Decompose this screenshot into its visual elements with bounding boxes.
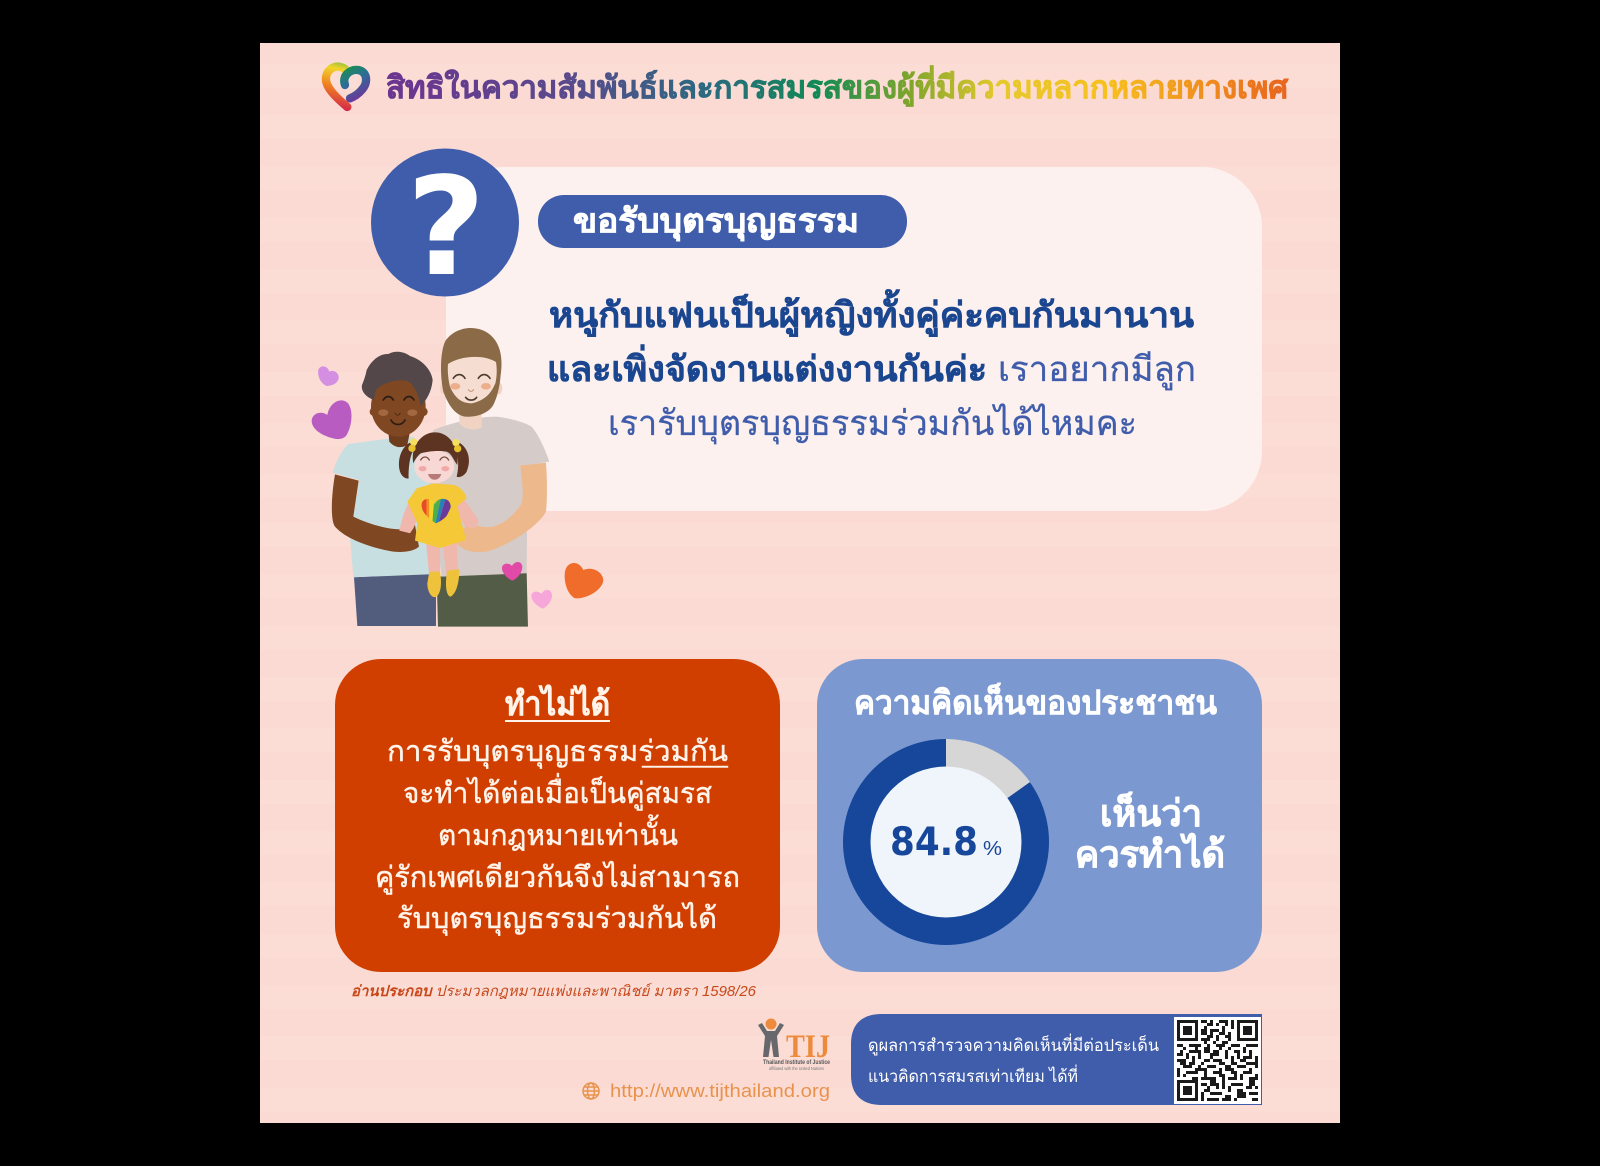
result text: เห็นว่า	[1100, 790, 1202, 834]
donut chart 84.8%: %	[983, 838, 1002, 860]
icon: question mark circle: ?	[407, 149, 485, 307]
donut chart 84.8%: 84.8	[890, 820, 978, 865]
topic pill: ขอรับบุตรบุญธรรม	[573, 202, 859, 242]
logo: TIJ	[758, 1018, 831, 1071]
citation: อ่านประกอบ ประมวลกฎหมายแพ่งและพาณิชย์ มาตรา 1598/26	[351, 982, 757, 1000]
survey link panel: ดูผลการสำรวจความคิดเห็นที่มีต่อประเด็น	[868, 1033, 1159, 1056]
legal explanation text: รับบุตรบุญธรรมร่วมกันได้	[397, 901, 717, 936]
website link: http://www.tijthailand.org	[610, 1081, 830, 1101]
question text: หนูกับแฟนเป็นผู้หญิงทั้งคู่ค่ะคบกันมานาน	[549, 289, 1194, 337]
question text: และเพิ่งจัดงานแต่งงานกันค่ะ	[547, 344, 987, 389]
figure: left parent	[332, 352, 437, 626]
legal explanation text: ตามกฎหมายเท่านั้น	[438, 814, 678, 852]
background page	[260, 43, 1340, 1123]
icon: question mark circle	[371, 148, 519, 307]
result text: ควรทำได้	[1075, 832, 1225, 875]
donut chart 84.8%	[843, 739, 1049, 945]
title: สิทธิในความสัมพันธ์และการสมรสของผู้ที่มีความหลากหลายทางเพศ	[386, 65, 1289, 107]
survey link panel: แนวคิดการสมรสเท่าเทียม ได้ที่	[868, 1064, 1078, 1086]
panel: public opinion	[817, 659, 1262, 972]
figure: right parent	[427, 328, 549, 627]
logo: TIJ: TIJ	[786, 1029, 830, 1065]
survey link panel	[851, 1014, 1262, 1105]
QR code	[1174, 1017, 1261, 1104]
panel: cannot do (legal answer)	[335, 659, 780, 972]
result text	[1075, 790, 1225, 875]
legal explanation text: คู่รักเพศเดียวกันจึงไม่สามารถ	[375, 860, 740, 895]
heading: cannot do: ทำไม่ได้	[505, 684, 610, 722]
legal explanation text: จะทำได้ต่อเมื่อเป็นคู่สมรส	[403, 773, 712, 811]
legal explanation text	[375, 736, 740, 936]
figure: child	[399, 432, 479, 597]
illustration: family with child and hearts	[312, 328, 603, 627]
question text: เราอยากมีลูก	[998, 350, 1196, 390]
icon: rainbow heart logo	[326, 67, 366, 107]
panel: question bubble	[446, 167, 1262, 511]
legal explanation text: การรับบุตรบุญธรรมร่วมกัน	[387, 736, 728, 769]
logo: TIJ: affiliated with the United Nations	[769, 1066, 825, 1071]
topic pill	[538, 195, 907, 248]
question text	[547, 289, 1196, 444]
logo: TIJ: Thailand Institute of Justice	[763, 1060, 831, 1066]
question text: เรารับบุตรบุญธรรมร่วมกันได้ไหมคะ	[608, 403, 1137, 444]
heading: public opinion: ความคิดเห็นของประชาชน	[854, 682, 1217, 721]
icon: hearts	[312, 366, 603, 609]
